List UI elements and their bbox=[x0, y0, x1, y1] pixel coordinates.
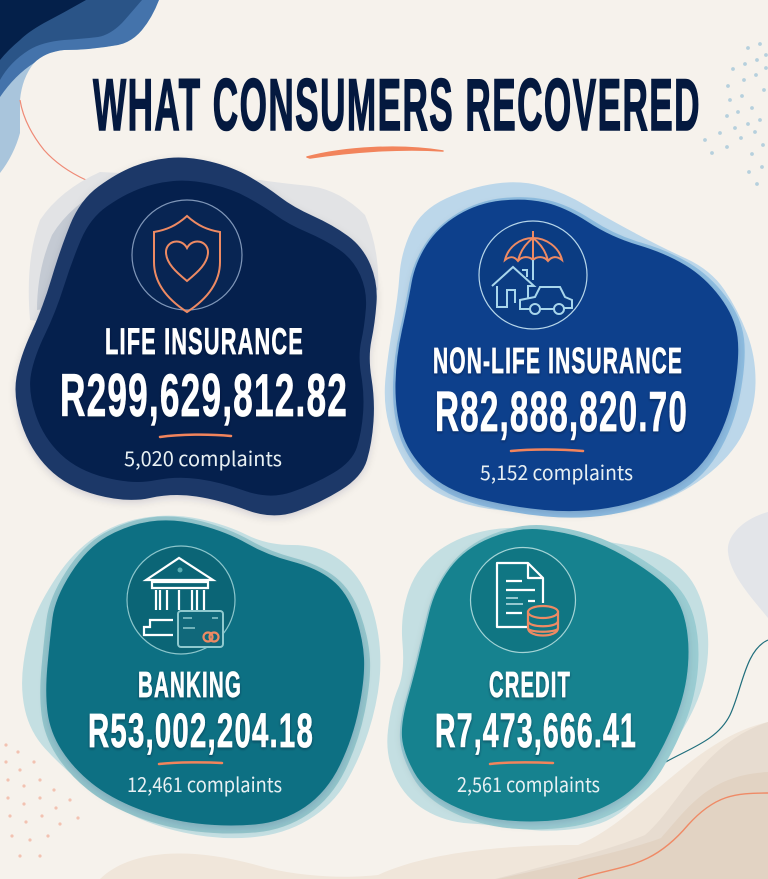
complaints: credit: 2,561 complaints bbox=[457, 769, 600, 798]
complaints: non-life insurance: 5,152 complaints bbox=[480, 457, 633, 486]
panel: banking bbox=[22, 516, 380, 838]
decoration: dots bottom-left bbox=[4, 743, 80, 858]
accent underline bbox=[511, 450, 583, 451]
icon: umbrella over house and car bbox=[479, 221, 587, 329]
amount: credit: R7,473,666.41 bbox=[435, 705, 637, 758]
panel: credit bbox=[387, 528, 708, 831]
amount: banking: R53,002,204.18 bbox=[88, 705, 314, 758]
icon: bank and card bbox=[127, 546, 235, 654]
heading: life insurance: LIFE INSURANCE bbox=[105, 321, 304, 362]
heading: credit: CREDIT bbox=[489, 664, 571, 705]
icon: shield with heart bbox=[132, 200, 242, 312]
accent underline bbox=[490, 762, 553, 764]
heading: banking: BANKING bbox=[138, 664, 242, 705]
icon: document and coins bbox=[470, 548, 576, 652]
complaints: life insurance: 5,020 complaints bbox=[124, 443, 282, 472]
panel: non-life insurance bbox=[385, 182, 756, 515]
panel: life insurance bbox=[15, 157, 378, 515]
background: bottom waves bbox=[100, 512, 768, 879]
decoration: dots top-right bbox=[703, 42, 768, 186]
amount: life insurance: R299,629,812.82 bbox=[60, 362, 348, 429]
accent underline bbox=[160, 435, 231, 437]
background: top-left waves bbox=[0, 0, 159, 173]
title underline bbox=[307, 147, 443, 158]
accent underline bbox=[159, 762, 222, 764]
decoration: coral thin line top-left bbox=[20, 100, 86, 180]
complaints: banking: 12,461 complaints bbox=[127, 769, 282, 798]
